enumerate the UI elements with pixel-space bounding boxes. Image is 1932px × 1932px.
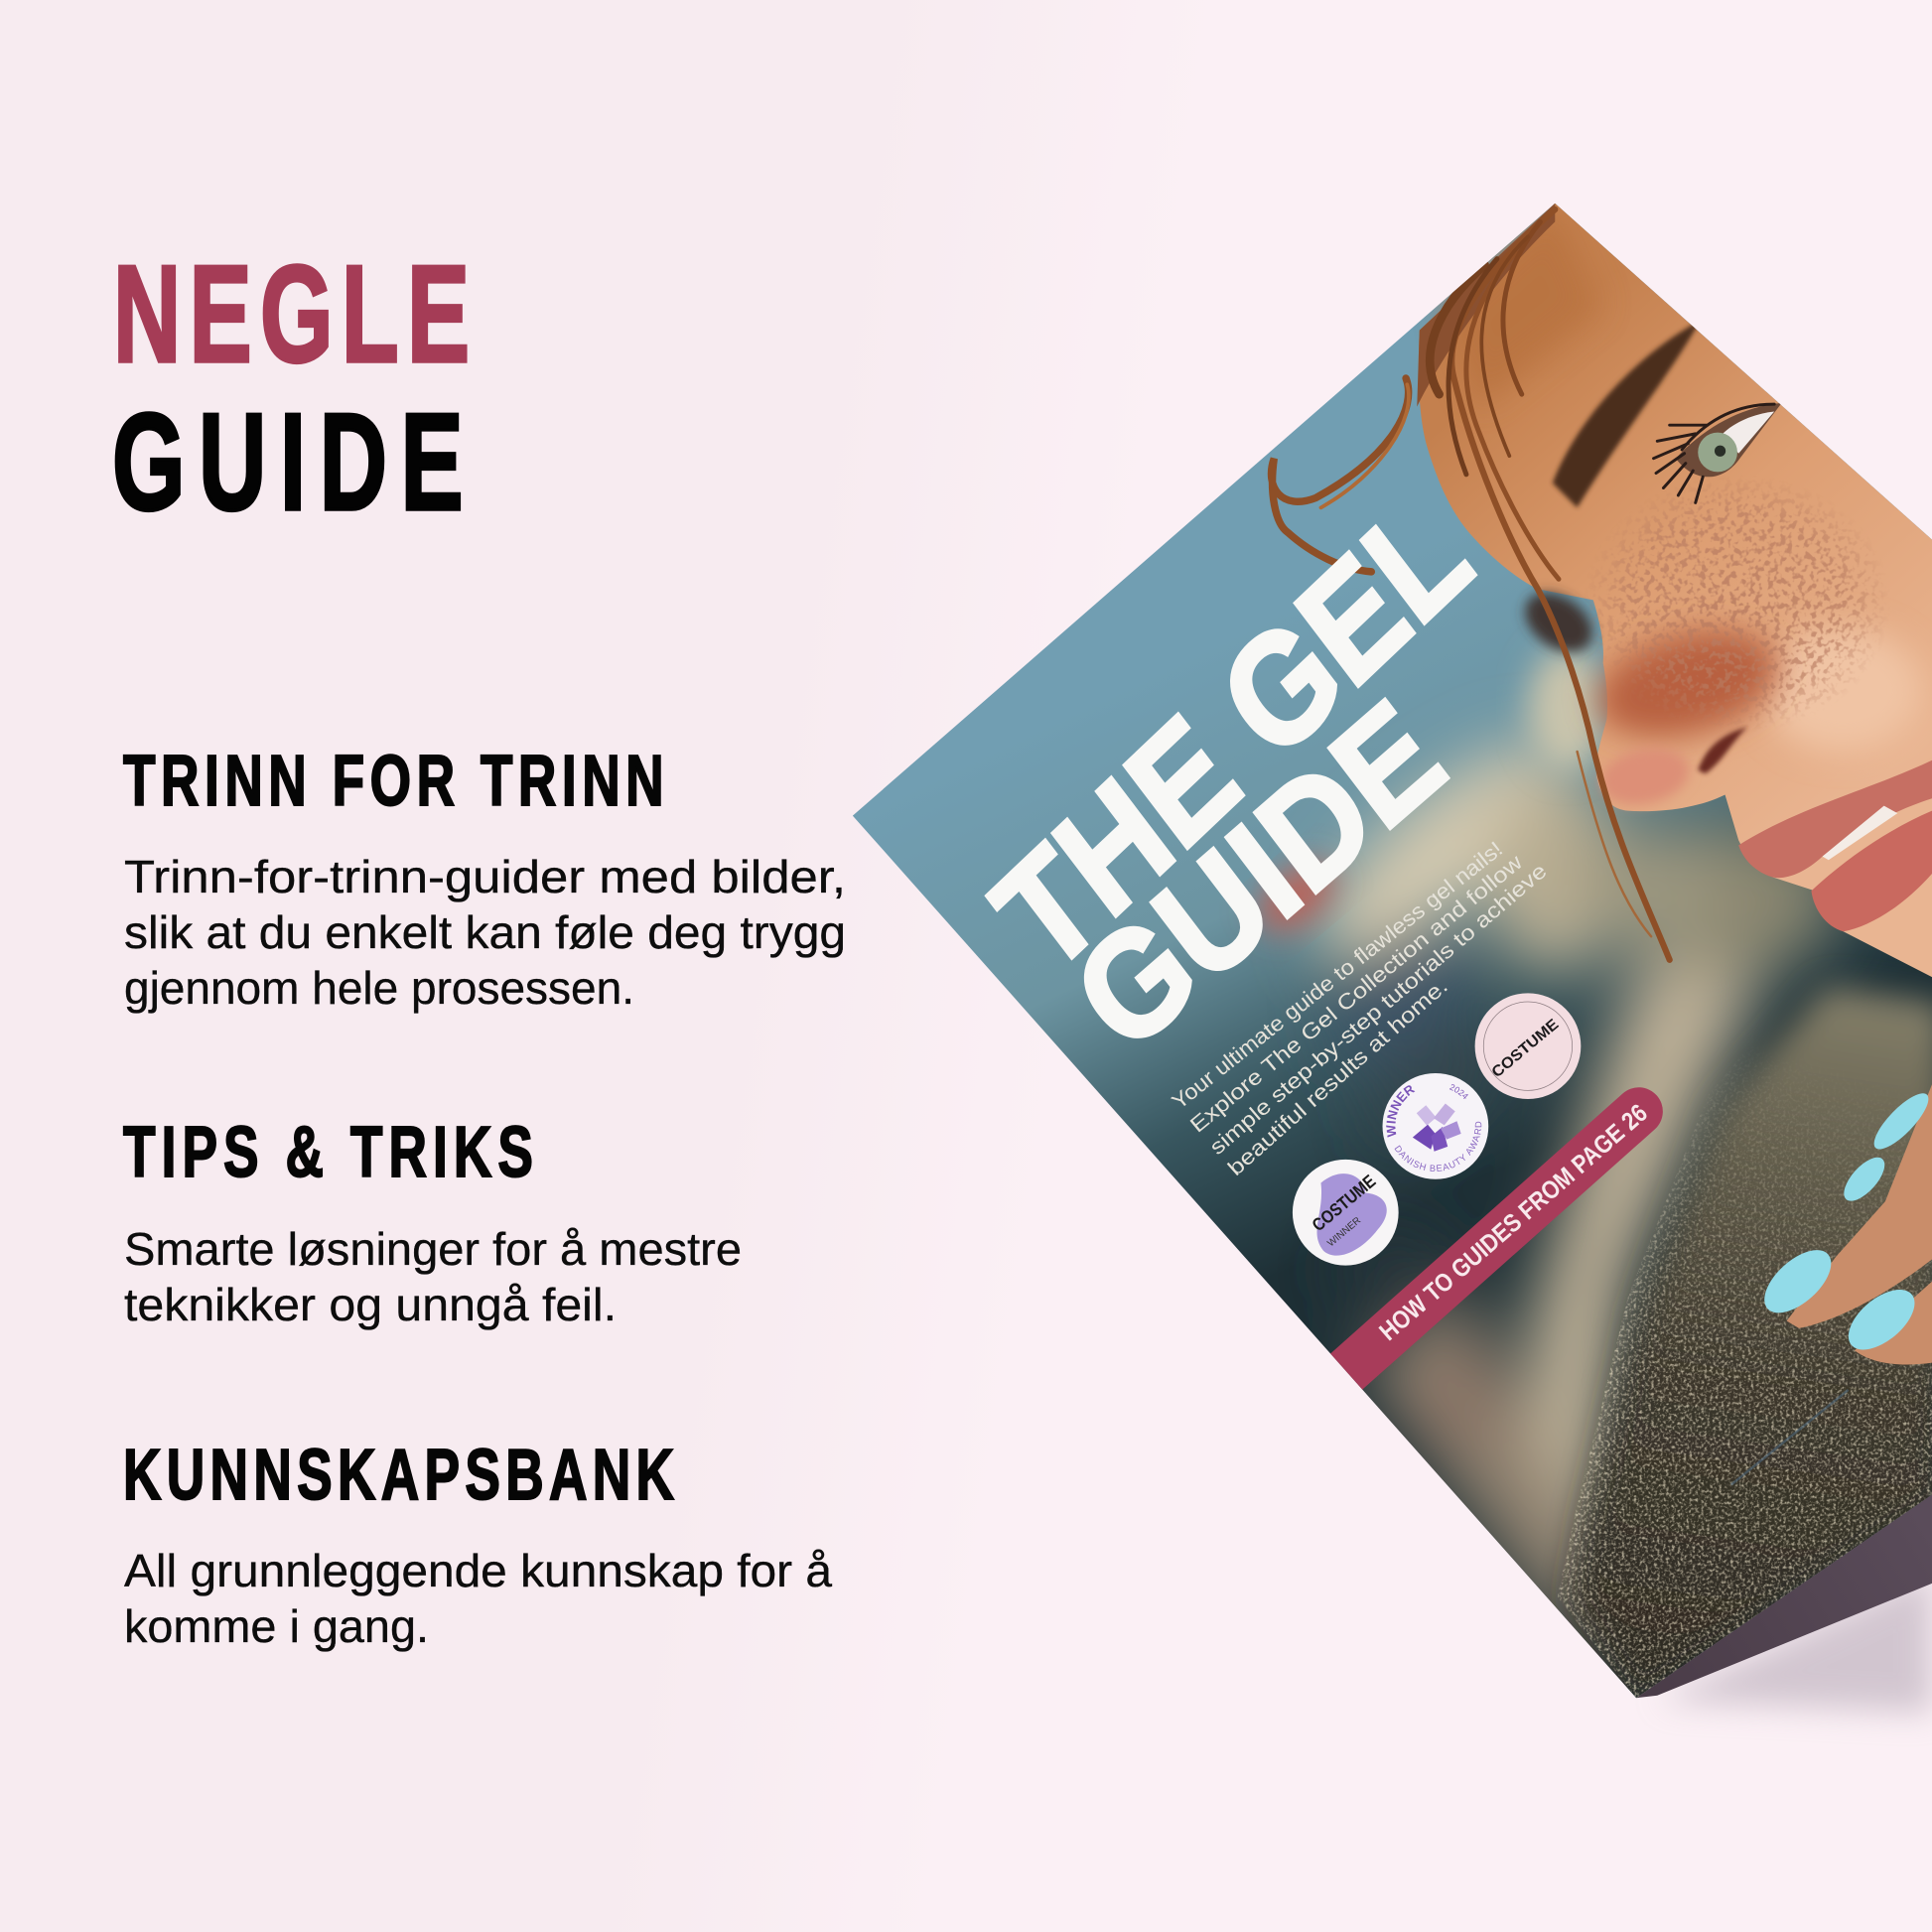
hair mass — [1417, 204, 1555, 407]
lower lip — [1811, 811, 1932, 931]
textured stone surface — [1571, 986, 1932, 1707]
booklet spine side — [1636, 1494, 1932, 1698]
section: kunnskapsbank — [123, 1436, 832, 1652]
nail: middle — [1838, 1279, 1925, 1361]
far cheek blur — [1528, 647, 1606, 770]
cover title — [967, 465, 1498, 1082]
cover title line: guide: GUIDE — [1046, 670, 1471, 1082]
booklet mockup — [853, 203, 1932, 1724]
body text: tips og triks — [124, 1223, 742, 1330]
badge award text: DANISH BEAUTY AWARD — [1394, 1122, 1481, 1172]
hair — [1272, 204, 1670, 960]
title: negle guide — [112, 237, 470, 539]
blue thread on stone — [1731, 1390, 1849, 1485]
red cheek — [1587, 613, 1790, 756]
iris — [1698, 433, 1737, 472]
booklet shadow — [1657, 1571, 1932, 1713]
hand with blue nails — [1753, 1084, 1932, 1365]
section: tips og triks — [123, 1113, 742, 1330]
blurred beach background — [1291, 712, 1836, 1713]
eye lid shadow — [1676, 403, 1782, 477]
pill banner — [1337, 1099, 1653, 1380]
badge disc — [1383, 1073, 1488, 1179]
body text: kunnskapsbank: All grunnleggende kunnskap for å — [124, 1545, 832, 1596]
pill text: HOW TO GUIDES FROM PAGE 26 — [1374, 1099, 1653, 1346]
eye — [1654, 403, 1782, 502]
heading: trinn for trinn: TRINN FOR TRINN — [123, 742, 664, 821]
badge ring — [1483, 1002, 1573, 1090]
body text: tips og triks: Smarte løsninger for å mestre — [124, 1223, 742, 1275]
eyebrow — [1553, 321, 1701, 507]
nail: little — [1866, 1086, 1932, 1157]
red blur accent — [1246, 850, 1346, 944]
cover description: Your ultimate guide to flawless gel nails! — [1167, 836, 1507, 1114]
forehead shade — [1442, 204, 1601, 407]
face — [1272, 204, 1932, 977]
badge winner text: WINNER — [1386, 1085, 1416, 1138]
upper lip — [1738, 760, 1932, 878]
body text: tips og triks: teknikker og unngå feil. — [124, 1279, 617, 1330]
title word: negle: NEGLE — [113, 237, 470, 391]
eye white — [1723, 412, 1774, 454]
cover description: beautiful results at home. — [1223, 973, 1452, 1180]
pill shape — [1337, 1111, 1639, 1380]
badge disc — [1475, 993, 1581, 1099]
section: trinn for trinn — [123, 742, 846, 1014]
teeth — [1823, 806, 1897, 860]
badge award year: 2024 — [1449, 1084, 1468, 1099]
badge: costume favorites — [1475, 993, 1581, 1099]
eyelashes — [1654, 404, 1774, 502]
cover title line: the gel: THE GEL — [967, 465, 1498, 1006]
cover photo background — [838, 185, 1932, 1713]
body text: kunnskapsbank: komme i gang. — [124, 1600, 429, 1652]
nail: index — [1753, 1239, 1842, 1324]
stone grain — [1558, 1064, 1932, 1698]
badge disc — [1293, 1160, 1399, 1266]
badge winner: WINNER — [1325, 1215, 1363, 1249]
body text: kunnskapsbank — [124, 1545, 832, 1652]
cheek highlight — [1762, 628, 1922, 752]
badge purple blob — [1317, 1173, 1387, 1256]
body text: trinn for trinn: slik at du enkelt kan føle deg trygg — [124, 906, 846, 958]
booklet cover — [853, 203, 1932, 1698]
finger upper — [1787, 1084, 1932, 1328]
nose shading — [1595, 741, 1694, 812]
nostril — [1698, 727, 1747, 773]
finger lower — [1855, 1282, 1932, 1365]
body text: trinn for trinn — [124, 851, 846, 1014]
cover description — [1167, 836, 1552, 1180]
cover description: simple step-by-step tutorials to achieve — [1204, 858, 1552, 1160]
blurred far eye — [1514, 581, 1603, 663]
body text: trinn for trinn: gjennom hele prosessen. — [124, 962, 634, 1014]
badge text: COSTUME — [1309, 1171, 1379, 1235]
freckles — [1584, 475, 1891, 733]
badge text: COSTUME — [1489, 1016, 1562, 1081]
badge: danish beauty award — [1382, 1073, 1489, 1179]
title word: guide: GUIDE — [112, 385, 464, 539]
badge: costume winner — [1293, 1160, 1399, 1266]
cover description: Explore The Gel Collection and follow — [1185, 849, 1527, 1138]
heading: kunnskapsbank: KUNNSKAPSBANK — [123, 1436, 674, 1515]
body text: trinn for trinn: Trinn-for-trinn-guider med bilder, — [124, 851, 846, 902]
pupil — [1715, 446, 1725, 457]
heading: tips og triks: TIPS & TRIKS — [123, 1113, 533, 1192]
nail: ring — [1837, 1151, 1891, 1207]
face skin — [1419, 204, 1932, 977]
badge star — [1403, 1093, 1469, 1160]
